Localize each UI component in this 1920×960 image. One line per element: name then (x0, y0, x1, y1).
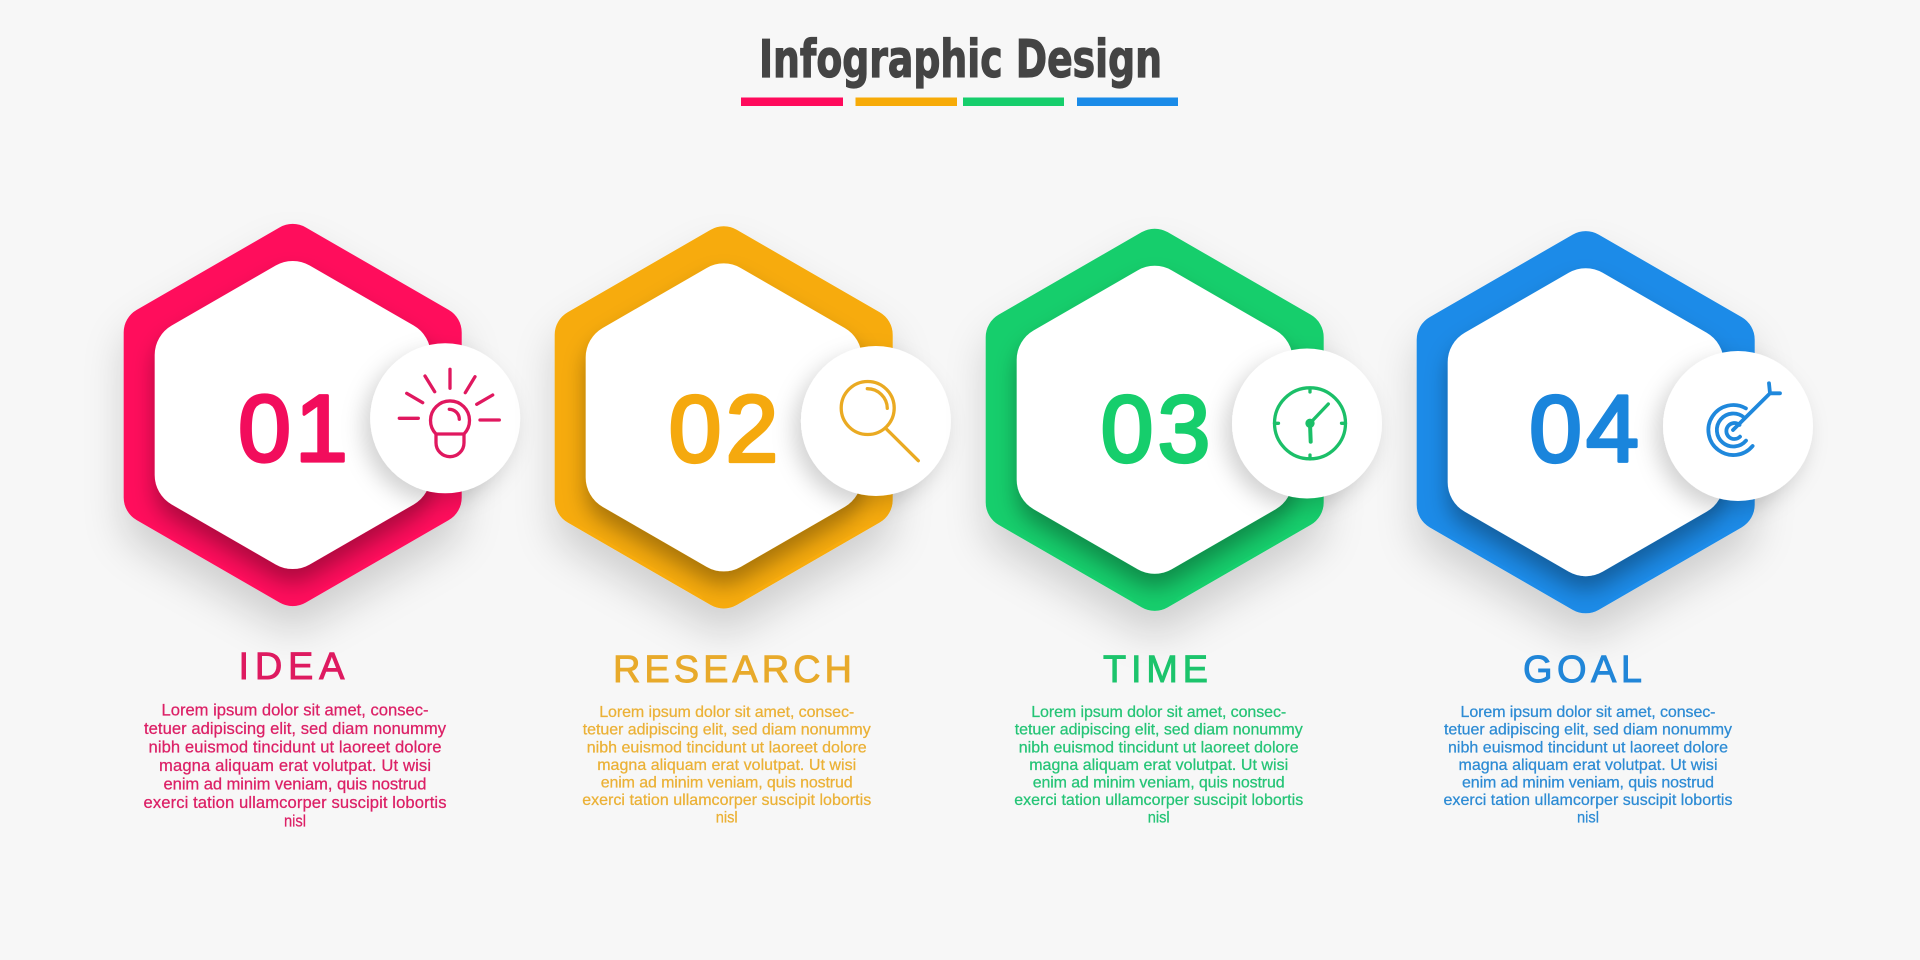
icon: clock (1232, 348, 1382, 498)
text block: research: Lorem ipsum dolor sit amet, consec- (599, 704, 854, 721)
text block: time: nisl (1148, 810, 1170, 827)
text block: time: magna aliquam erat volutpat. Ut wisi (1029, 757, 1288, 774)
text block: idea: nibh euismod tincidunt ut laoreet dolore (148, 738, 442, 756)
text block: idea: magna aliquam erat volutpat. Ut wisi (159, 756, 431, 775)
text block: research: exerci tation ullamcorper suscipit lobortis (582, 792, 871, 809)
heading: idea: IDEA (238, 646, 345, 688)
text block: goal: enim ad minim veniam, quis nostrud (1462, 774, 1714, 792)
title colour bars (741, 98, 1178, 106)
text block: idea: Lorem ipsum dolor sit amet, consec- (162, 700, 428, 720)
text block: research: enim ad minim veniam, quis nostrud (601, 774, 853, 792)
text block: time: nibh euismod tincidunt ut laoreet dolore (1019, 739, 1299, 756)
heading: goal: GOAL (1523, 649, 1642, 691)
number 03: 03 (1101, 376, 1214, 482)
title: Infographic Design (759, 30, 1162, 90)
text block: goal (1444, 704, 1732, 827)
text block: idea: exerci tation ullamcorper suscipit lobortis (144, 793, 446, 812)
text block: goal: nisl (1577, 810, 1599, 827)
text block: time: Lorem ipsum dolor sit amet, consec- (1031, 704, 1286, 721)
number 01: 01 (238, 376, 352, 482)
text block: time (1014, 704, 1303, 827)
number 02: 02 (669, 376, 782, 482)
hexagon badge 04 (1443, 257, 1729, 587)
text block: time: enim ad minim veniam, quis nostrud (1033, 774, 1285, 792)
hexagon badge 01 (150, 250, 436, 580)
heading: research: RESEARCH (613, 649, 852, 691)
hexagon badge 02 (581, 252, 867, 582)
text block: goal: Lorem ipsum dolor sit amet, consec- (1460, 704, 1716, 721)
text block: time: tetuer adipiscing elit, sed diam nonummy (1015, 722, 1303, 739)
number 04: 04 (1529, 376, 1643, 482)
text block: research: tetuer adipiscing elit, sed diam nonummy (583, 722, 871, 739)
text block: idea (144, 700, 447, 830)
panel: step 01 idea (144, 250, 520, 830)
text block: goal: magna aliquam erat volutpat. Ut wisi (1458, 757, 1718, 774)
heading: time: TIME (1103, 649, 1208, 691)
text block: research: nibh euismod tincidunt ut laoreet dolore (587, 739, 867, 756)
icon: target and arrow (1663, 351, 1813, 501)
text block: idea: enim ad minim veniam, quis nostrud (164, 774, 426, 794)
panel: step 02 research (581, 252, 951, 827)
panel: step 03 time (1012, 255, 1382, 827)
text block: idea: tetuer adipiscing elit, sed diam nonummy (144, 719, 447, 738)
text block: goal: nibh euismod tincidunt ut laoreet dolore (1448, 739, 1728, 756)
hexagon badge 03 (1012, 255, 1298, 585)
text block: goal: exerci tation ullamcorper suscipit lobortis (1444, 792, 1732, 809)
text block: goal: tetuer adipiscing elit, sed diam nonummy (1444, 722, 1732, 739)
text block: idea: nisl (284, 812, 306, 830)
text block: research: nisl (716, 810, 738, 827)
text block: research (582, 704, 871, 827)
icon: magnifying glass (801, 346, 951, 496)
infographic canvas (108, 36, 1814, 827)
panel: step 04 goal (1443, 257, 1813, 827)
text block: research: magna aliquam erat volutpat. Ut wisi (597, 757, 856, 774)
text block: time: exerci tation ullamcorper suscipit lobortis (1014, 792, 1303, 809)
icon: light bulb (370, 343, 520, 493)
